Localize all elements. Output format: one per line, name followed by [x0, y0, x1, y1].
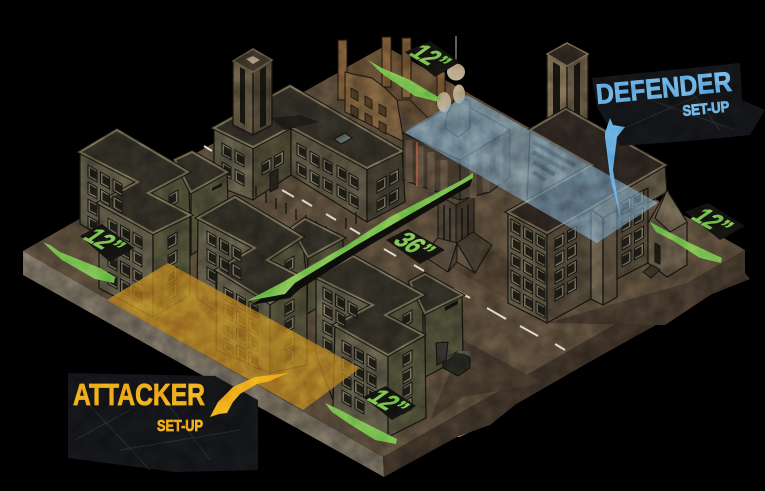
label: 12 left: 12” — [76, 224, 132, 259]
left T-shaped building annex — [148, 152, 229, 255]
green 12 inch bar left — [43, 242, 115, 283]
attacker background — [68, 373, 258, 472]
back left factory building — [214, 86, 405, 222]
tower stem — [438, 195, 456, 250]
back pillars — [338, 37, 445, 104]
left T-shaped building — [80, 130, 190, 317]
label: 12 back: 12” — [402, 40, 458, 75]
green 12 inch bar right — [650, 222, 722, 263]
middle building — [197, 197, 307, 373]
front building annex — [385, 274, 463, 377]
label: 36: 36” — [386, 228, 442, 263]
defender title: DEFENDER — [595, 66, 733, 110]
front building — [316, 256, 426, 437]
defender background — [592, 63, 765, 146]
roof vent — [334, 133, 352, 144]
road markings — [204, 146, 565, 350]
side annex and buttress — [648, 190, 687, 277]
attacker arrow — [210, 373, 288, 417]
middle building annex — [267, 219, 343, 314]
attacker subtitle: SET-UP — [157, 418, 203, 435]
green 36 inch arrow — [247, 173, 473, 305]
label: 12 front: 12” — [360, 385, 416, 420]
defender subtitle: SET-UP — [682, 98, 730, 120]
central tower — [403, 36, 510, 273]
yellow attacker zone — [107, 263, 360, 410]
green 12 inch bar front — [325, 403, 397, 444]
back left tower — [233, 49, 272, 135]
fence — [256, 186, 356, 243]
upper block — [403, 133, 460, 200]
label: 12 right: 12” — [684, 204, 740, 239]
defender callout — [592, 63, 765, 220]
ruined orange wall — [345, 72, 440, 142]
green 12 inch bar back — [368, 60, 440, 102]
attacker callout — [68, 373, 288, 472]
defender arrow — [605, 118, 625, 220]
blue defender zone — [404, 95, 658, 243]
satellite dishes — [447, 64, 465, 80]
tower feet — [422, 238, 457, 272]
attacker title: ATTACKER — [73, 377, 205, 412]
right defender building — [508, 109, 687, 323]
dumpster — [436, 342, 470, 376]
right building tower — [547, 43, 588, 139]
